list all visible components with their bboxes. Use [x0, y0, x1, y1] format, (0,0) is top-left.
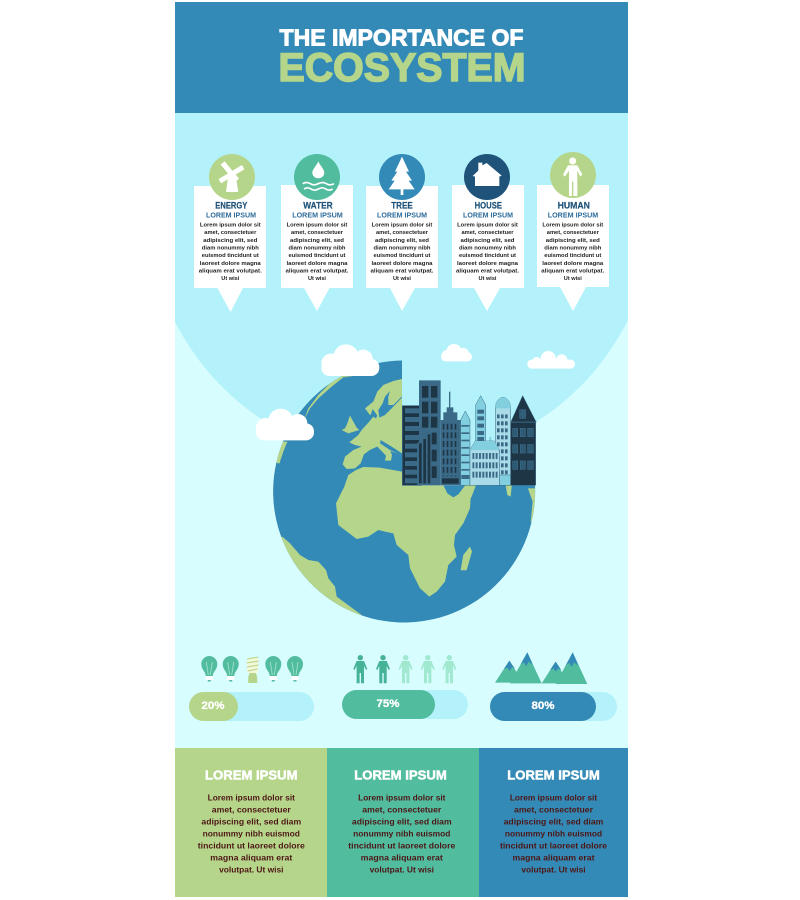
- body text: [286, 222, 349, 282]
- body text: diam nonummy nibh: [544, 246, 602, 252]
- city skyline: [402, 380, 536, 485]
- panel heading: LOREM IPSUM: [507, 768, 600, 782]
- subheading: LOREM IPSUM: [463, 210, 513, 220]
- heading: ENERGY: [215, 200, 247, 210]
- icon: tree: [379, 154, 425, 200]
- panel body: amet, consectetuer: [514, 805, 593, 814]
- icon: windmill: [209, 154, 255, 200]
- icon: mountains: [495, 652, 587, 684]
- body text: diam nonummy nibh: [459, 246, 517, 252]
- cloud: top left: [321, 344, 379, 376]
- body text: Lorem ipsum dolor sit: [542, 222, 603, 228]
- body text: amet, consectetuer: [376, 230, 429, 236]
- body text: adipiscing elit, sed: [290, 238, 345, 244]
- panel body: [348, 793, 456, 874]
- body text: adipiscing elit, sed: [203, 238, 258, 244]
- heading: WATER: [303, 200, 333, 210]
- body text: laoreet dolore magna: [542, 261, 604, 267]
- building: dark gabled house: [511, 396, 536, 485]
- body text: amet, consectetuer: [291, 230, 344, 236]
- building: dark striped block: [402, 406, 422, 485]
- panel body: tincidunt ut laoreet dolore: [348, 841, 456, 850]
- progress bar: 20%: [189, 692, 314, 721]
- background: sky arc: [175, 113, 628, 449]
- panel: middle: [327, 748, 479, 897]
- body text: aliquam erat volutpat.: [541, 268, 605, 274]
- panel body: adipiscing elit, sed diam: [504, 817, 603, 826]
- panel body: tincidunt ut laoreet dolore: [500, 841, 608, 850]
- body text: Ut wisi: [393, 276, 411, 282]
- cloud: left: [256, 409, 314, 440]
- panel body: magna aliquam erat: [210, 853, 293, 862]
- building: domed tower: [495, 397, 511, 485]
- body text: Ut wisi: [478, 276, 497, 282]
- header panel: [175, 2, 628, 113]
- icon: bulb 2: [223, 656, 239, 682]
- panel: right: [479, 748, 628, 897]
- panel body: Lorem ipsum dolor sit: [208, 793, 295, 802]
- body text: diam nonummy nibh: [374, 246, 431, 252]
- panel heading: LOREM IPSUM: [354, 768, 447, 782]
- progress bar: 80%: [490, 692, 617, 721]
- body text: euismod tincidunt ut: [202, 253, 259, 259]
- panel body: nonummy nibh euismod: [353, 829, 451, 838]
- icon: bulb 1: [201, 656, 217, 682]
- panel body: nonummy nibh euismod: [505, 829, 602, 838]
- panel body: tincidunt ut laoreet dolore: [198, 841, 305, 850]
- icon: bulb 5: [287, 656, 303, 682]
- panel: left: [175, 748, 327, 897]
- building: spire tower: [476, 396, 486, 443]
- body text: laoreet dolore magna: [200, 261, 262, 267]
- clouds: [256, 344, 575, 440]
- icon: person 4: [421, 655, 435, 683]
- body text: Lorem ipsum dolor sit: [372, 222, 432, 228]
- body text: euismod tincidunt ut: [288, 253, 346, 259]
- background: page: [175, 113, 628, 748]
- body text: Ut wisi: [564, 276, 582, 282]
- icon: person 5: [442, 655, 456, 683]
- body text: [199, 222, 262, 282]
- body text: [370, 222, 434, 282]
- subheading: LOREM IPSUM: [548, 210, 598, 220]
- body text: Lorem ipsum dolor sit: [200, 222, 261, 228]
- body text: Ut wisi: [221, 276, 240, 282]
- body text: [456, 222, 519, 282]
- card: human: [537, 152, 609, 311]
- body text: diam nonummy nibh: [288, 246, 346, 252]
- subheading: LOREM IPSUM: [292, 210, 343, 220]
- icon: person 1: [353, 655, 367, 683]
- panel body: volutpat. Ut wisi: [219, 865, 283, 874]
- body text: aliquam erat volutpat.: [286, 268, 349, 274]
- heading: HOUSE: [475, 200, 502, 210]
- panel body: volutpat. Ut wisi: [370, 865, 434, 874]
- body text: euismod tincidunt ut: [459, 253, 516, 259]
- icon: water drop: [294, 154, 340, 200]
- card: water: [281, 154, 353, 311]
- card: energy: [194, 154, 266, 312]
- icon: person 2: [376, 655, 390, 683]
- building: tall tower: [417, 380, 441, 485]
- cloud: right: [527, 351, 575, 369]
- subheading: LOREM IPSUM: [206, 210, 256, 220]
- body text: aliquam erat volutpat.: [370, 268, 434, 274]
- icons: light bulbs: [201, 656, 303, 683]
- card: house: [452, 154, 524, 311]
- panel body: amet, consectetuer: [362, 805, 441, 814]
- body text: adipiscing elit, sed: [546, 238, 600, 244]
- label: 75%: [376, 698, 400, 710]
- building: stepped block: [441, 392, 461, 485]
- body text: aliquam erat volutpat.: [199, 268, 262, 274]
- body text: euismod tincidunt ut: [544, 253, 601, 259]
- subheading: LOREM IPSUM: [377, 210, 427, 220]
- icon: person 3: [399, 655, 413, 683]
- card: tree: [366, 154, 438, 311]
- panel body: [500, 793, 608, 874]
- panel body: adipiscing elit, sed diam: [201, 817, 301, 826]
- label: 80%: [532, 700, 555, 712]
- panel body: nonummy nibh euismod: [203, 829, 300, 838]
- icon: bulb 4: [265, 656, 281, 682]
- body text: amet, consectetuer: [462, 230, 514, 236]
- panel body: volutpat. Ut wisi: [521, 865, 586, 874]
- body text: amet, consectetuer: [204, 230, 257, 236]
- body text: Lorem ipsum dolor sit: [457, 222, 518, 228]
- icon: eco bulb: [247, 657, 259, 683]
- panel heading: LOREM IPSUM: [205, 768, 298, 782]
- body text: euismod tincidunt ut: [374, 253, 431, 259]
- title line 1: THE IMPORTANCE OF: [280, 24, 524, 50]
- body text: [541, 222, 605, 282]
- body text: Ut wisi: [308, 276, 326, 282]
- body text: aliquam erat volutpat.: [456, 268, 519, 274]
- cloud: center: [441, 344, 472, 361]
- label: 20%: [202, 700, 225, 712]
- heading: HUMAN: [558, 200, 590, 210]
- panel body: Lorem ipsum dolor sit: [510, 793, 597, 802]
- heading: TREE: [391, 200, 413, 210]
- body text: diam nonummy nibh: [202, 246, 259, 252]
- panel body: magna aliquam erat: [361, 853, 443, 862]
- building: narrow light tower: [461, 411, 470, 485]
- icon: human: [550, 152, 596, 198]
- body text: laoreet dolore magna: [286, 261, 348, 267]
- body text: amet, consectetuer: [547, 230, 600, 236]
- panel body: amet, consectetuer: [212, 805, 291, 814]
- panel body: Lorem ipsum dolor sit: [358, 793, 446, 802]
- globe: [272, 360, 540, 622]
- panel body: [198, 793, 305, 874]
- icon: house: [464, 154, 510, 200]
- panel body: magna aliquam erat: [512, 853, 595, 862]
- body text: laoreet dolore magna: [457, 261, 519, 267]
- progress bar: 75%: [342, 690, 468, 719]
- infographic: [175, 2, 628, 897]
- title line 2: ECOSYSTEM: [278, 46, 526, 90]
- icons: people: [353, 655, 456, 683]
- body text: adipiscing elit, sed: [375, 238, 430, 244]
- body text: laoreet dolore magna: [372, 261, 433, 267]
- panel body: adipiscing elit, sed diam: [352, 817, 452, 826]
- body text: adipiscing elit, sed: [460, 238, 515, 244]
- body text: Lorem ipsum dolor sit: [287, 222, 347, 228]
- building: low hall: [470, 437, 499, 485]
